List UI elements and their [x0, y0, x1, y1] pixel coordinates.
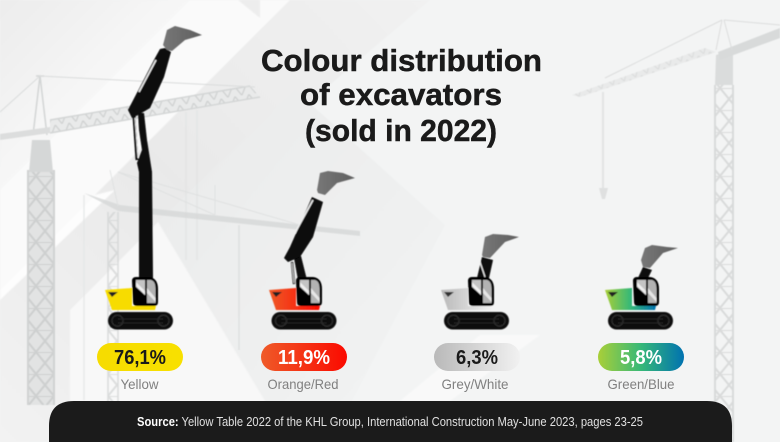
category labels: Yellow [120, 376, 159, 392]
value pill: orange/red 11,9% [261, 343, 347, 371]
excavator: green/blue [605, 245, 678, 330]
value pill: green/blue 5,8%: 5,8% [620, 347, 662, 369]
source footer: Source: Yellow Table 2022 of the KHL Group, International Construction May-June 2023, pages 23-25 [137, 414, 643, 429]
value pill: grey/white 6,3% [434, 343, 520, 371]
title: of excavators [300, 77, 502, 112]
value pill: grey/white 6,3%: 6,3% [456, 347, 498, 369]
excavator: orange/red [269, 171, 355, 330]
crane: centre tower crane [84, 170, 360, 402]
crane: left tower crane [0, 76, 260, 405]
category labels: Grey/White [442, 376, 509, 392]
category labels: Orange/Red [268, 376, 338, 392]
value pill: green/blue 5,8% [598, 343, 684, 371]
value pill: yellow 76,1% [97, 343, 183, 371]
title: Colour distribution [261, 43, 542, 78]
crane: right tower crane [572, 20, 780, 442]
excavator: grey/white [441, 234, 519, 330]
value pill: orange/red 11,9%: 11,9% [278, 347, 330, 369]
source footer [49, 401, 732, 442]
title [261, 43, 542, 148]
excavator: yellow [105, 26, 202, 330]
title: (sold in 2022) [305, 113, 497, 148]
category labels: Green/Blue [608, 376, 675, 392]
value pill: yellow 76,1%: 76,1% [114, 347, 166, 369]
category labels [120, 376, 675, 392]
